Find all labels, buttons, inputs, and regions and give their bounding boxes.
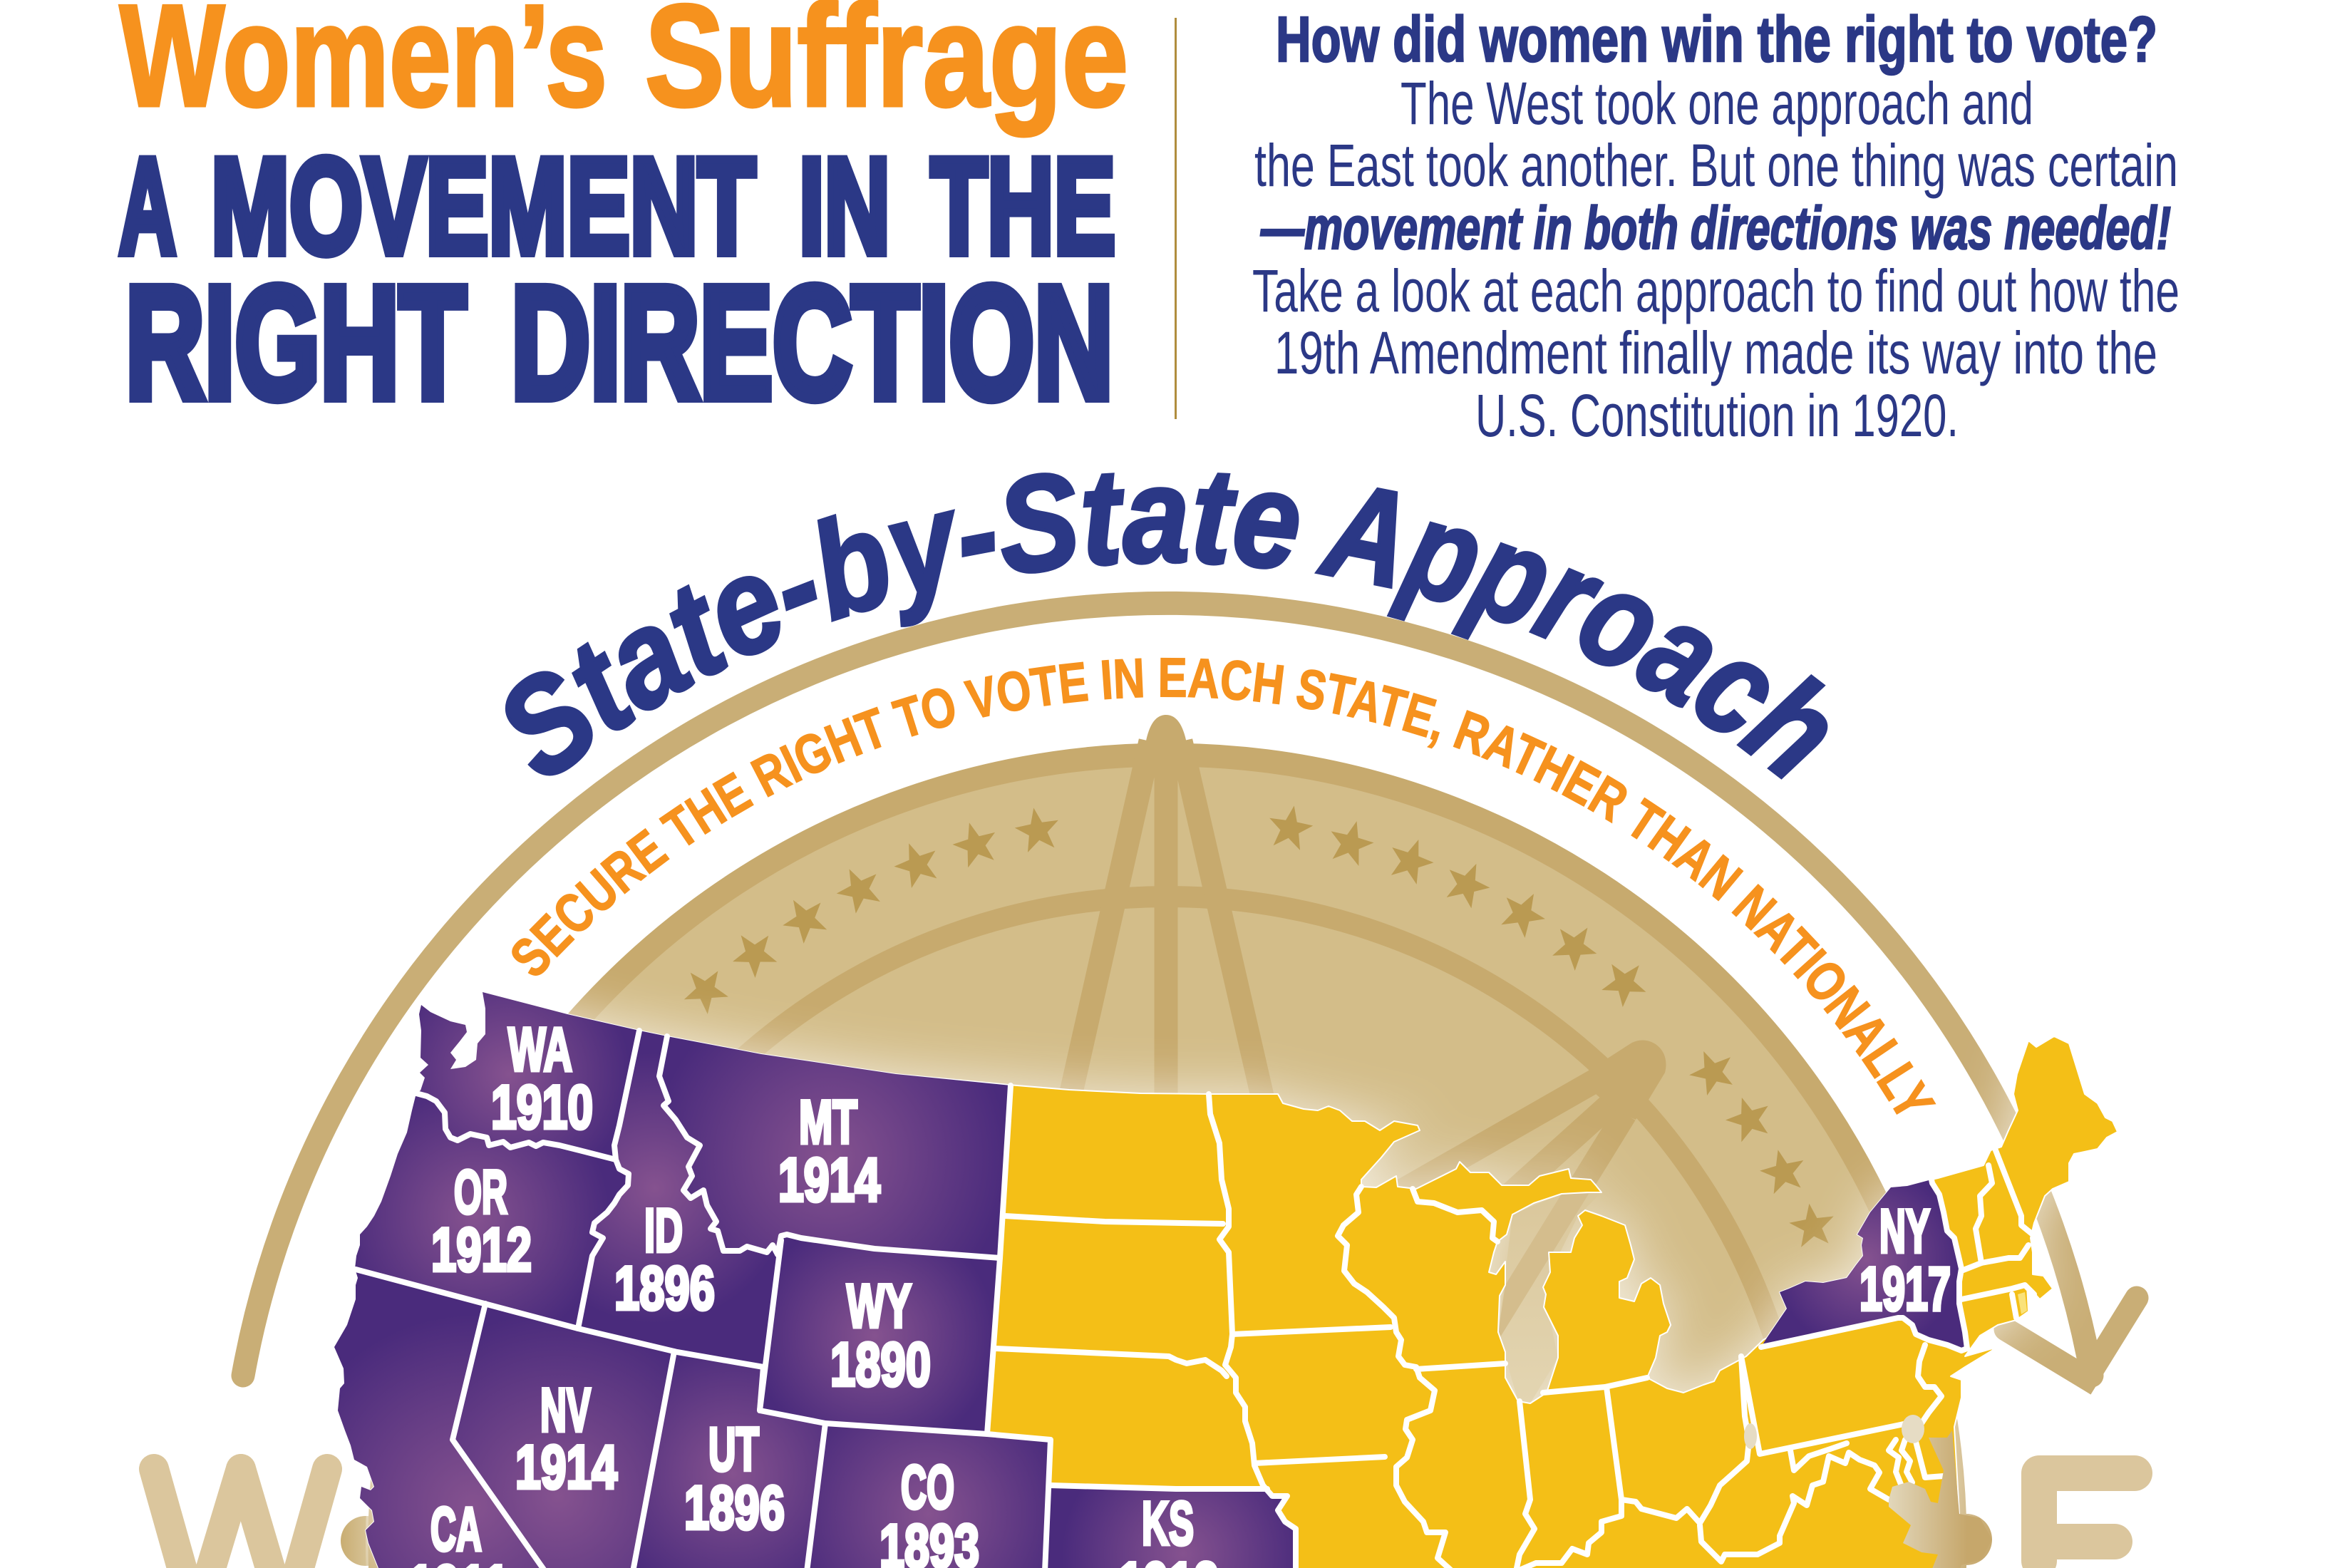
curved heading: State-by-State Approach: Approach xyxy=(1314,488,1827,780)
label: Idaho 1896: ID xyxy=(644,1197,683,1265)
divider rule xyxy=(1175,18,1177,419)
label: Montana 1914 xyxy=(778,1088,880,1214)
northeast arrow xyxy=(1397,1040,1666,1229)
label: Washington 1910: 1910 xyxy=(491,1073,593,1142)
state: CO xyxy=(807,1423,1051,1568)
state: KS xyxy=(1045,1485,1296,1568)
label: Utah 1896: 1896 xyxy=(684,1474,785,1542)
state: CA xyxy=(334,1269,545,1568)
label: Nevada 1914 xyxy=(515,1376,617,1502)
chesapeake and coast shading xyxy=(1889,1430,1992,1568)
subtitle line 2: DIRECTION xyxy=(511,254,1113,432)
curved heading: State-by-State Approach: State-by-State xyxy=(505,473,1299,775)
label: New York 1917: NY xyxy=(1879,1197,1930,1266)
label: Colorado 1893: CO xyxy=(901,1453,954,1522)
intro line 1: The West took one approach and xyxy=(1401,70,2033,137)
label: New York 1917 xyxy=(1860,1197,1951,1324)
subtitle line 1: IN xyxy=(799,130,890,282)
state borders xyxy=(356,1031,2034,1568)
label: Montana 1914: MT xyxy=(799,1088,857,1157)
label: Oregon 1912 xyxy=(431,1158,532,1284)
state: NY xyxy=(1761,1180,1967,1351)
state labels xyxy=(408,1016,1951,1568)
inner latitude arc xyxy=(530,897,1805,1568)
state: ID xyxy=(578,1031,778,1367)
state: OR xyxy=(355,1093,629,1329)
label: Nevada 1914: 1914 xyxy=(515,1433,617,1502)
label: Colorado 1893 xyxy=(880,1453,979,1568)
subtitle line 1: MOVEMENT xyxy=(211,130,755,282)
intro line 6: U.S. Constitution in 1920. xyxy=(1475,382,1959,449)
intro text block xyxy=(1252,4,2180,449)
curved tagline: SECURE THE RIGHT TO VOTE IN EACH STATE, RATHER THAN NATIONALLY xyxy=(512,657,1936,1115)
compass dome xyxy=(341,715,1992,1568)
label: Washington 1910: WA xyxy=(508,1016,572,1084)
US map xyxy=(334,992,2118,1568)
state: WA xyxy=(416,992,639,1160)
subtitle line 1: THE xyxy=(931,130,1115,282)
state: MT xyxy=(659,1036,1011,1258)
label: Kansas 1912 xyxy=(1118,1490,1219,1568)
label: California 1911 xyxy=(408,1495,510,1568)
label: Montana 1914: 1914 xyxy=(778,1146,880,1214)
delaware bay patch xyxy=(1902,1415,1924,1443)
label: Wyoming 1890: 1890 xyxy=(830,1331,931,1399)
label: Oregon 1912: OR xyxy=(454,1158,507,1227)
stars along the dome xyxy=(674,802,1843,1255)
label: Idaho 1896: 1896 xyxy=(614,1254,715,1323)
label: Kansas 1912: KS xyxy=(1142,1490,1194,1558)
curved heading: State-by-State Approach xyxy=(505,473,1827,780)
label: Washington 1910 xyxy=(491,1016,593,1142)
north arrow xyxy=(1062,715,1271,1155)
subtitle line 2: RIGHT xyxy=(125,254,466,432)
label: New York 1917: 1917 xyxy=(1860,1255,1951,1324)
label: Utah 1896: UT xyxy=(708,1415,759,1484)
state: UT xyxy=(633,1351,825,1568)
label: Wyoming 1890: WY xyxy=(847,1272,912,1341)
gold states: no early suffrage xyxy=(334,992,2118,1568)
ohio river patch xyxy=(1744,1423,1757,1449)
state: WY xyxy=(760,1234,1000,1434)
state: NV xyxy=(453,1304,674,1568)
compass letter E xyxy=(2039,1473,2135,1561)
arrow head xyxy=(2006,1298,2137,1378)
label: California 1911: CA xyxy=(430,1495,482,1564)
outer arc arrow pointing east xyxy=(243,603,2137,1378)
lake michigan with arrow band xyxy=(1497,1192,1601,1403)
label: Utah 1896 xyxy=(684,1415,785,1542)
soft fade behind map xyxy=(334,992,2118,1568)
label: Idaho 1896 xyxy=(614,1197,715,1323)
label: Oregon 1912: 1912 xyxy=(431,1216,532,1284)
dome disc and rim xyxy=(380,755,1955,1568)
label: Nevada 1914: NV xyxy=(540,1376,591,1445)
compass letter W xyxy=(154,1469,327,1568)
label: Wyoming 1890 xyxy=(830,1272,931,1399)
subtitle line 1: A xyxy=(119,130,176,282)
subtitle line 2 xyxy=(125,254,1113,432)
title: Women's Suffrage xyxy=(120,0,1128,137)
pale state: RI xyxy=(2018,1292,2027,1314)
